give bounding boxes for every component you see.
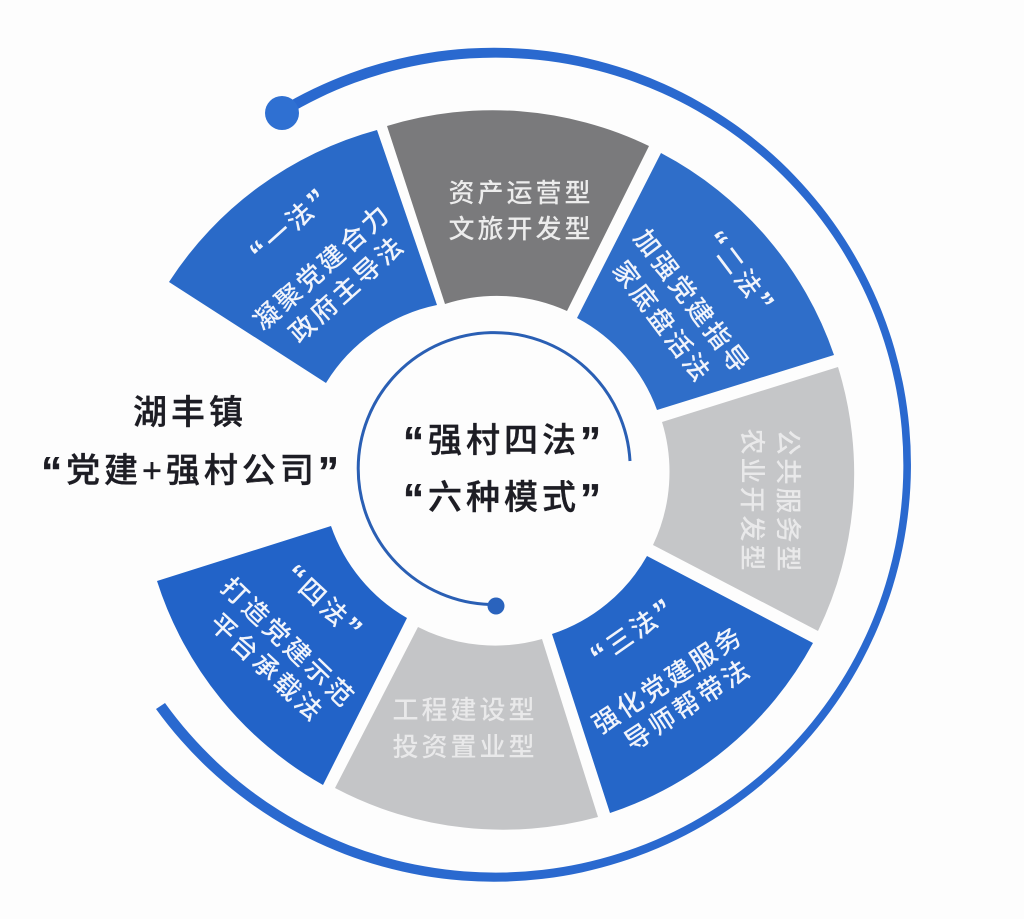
left title: 湖丰镇 [133, 394, 247, 432]
panel: 公共服务型: 公共服务型 [773, 429, 803, 575]
panel: 二法: 家底盘活法 [606, 255, 718, 389]
left title: “党建+强村公司” [41, 448, 343, 494]
inner arc with dot [358, 333, 630, 614]
panel: 一法: 政府主导法 [283, 229, 411, 349]
panel: 二法: “二法” [697, 224, 783, 322]
panel: 二法: 加强党建指导 [628, 223, 756, 381]
panel: 四法 [157, 526, 407, 785]
center title: “强村四法” [403, 418, 605, 464]
panel: 公共服务型 [653, 367, 854, 631]
panel: 三法: 导师帮带法 [619, 653, 757, 757]
panel: 一法: 凝聚党建合力 [247, 198, 397, 336]
left title [41, 394, 343, 494]
panel: 三法: “三法” [583, 590, 683, 674]
panel: 资产运营型: 资产运营型 [448, 178, 594, 208]
panel: 一法 [169, 130, 437, 383]
panel: 资产运营型: 文旅开发型 [448, 214, 594, 244]
panel: 四法: “四法” [277, 557, 371, 649]
panel: 工程建设型 [335, 627, 598, 830]
panel: 三法: 强化党建服务 [587, 620, 749, 740]
panel: 四法: 打造党建示范 [215, 572, 361, 714]
panel: 工程建设型: 工程建设型 [392, 695, 538, 725]
outer ring arc with dot [156, 48, 911, 882]
panel: 四法: 平台承载法 [204, 608, 330, 728]
panel: 二法 [577, 153, 834, 410]
panel: 一法: “一法” [242, 179, 338, 271]
panel: 三法 [552, 556, 813, 813]
center title [403, 418, 605, 522]
panel: 工程建设型: 投资置业型 [392, 732, 538, 762]
panel: 资产运营型 [387, 110, 649, 311]
panel: 公共服务型: 农业开发型 [737, 428, 767, 574]
center title: “六种模式” [403, 474, 605, 522]
